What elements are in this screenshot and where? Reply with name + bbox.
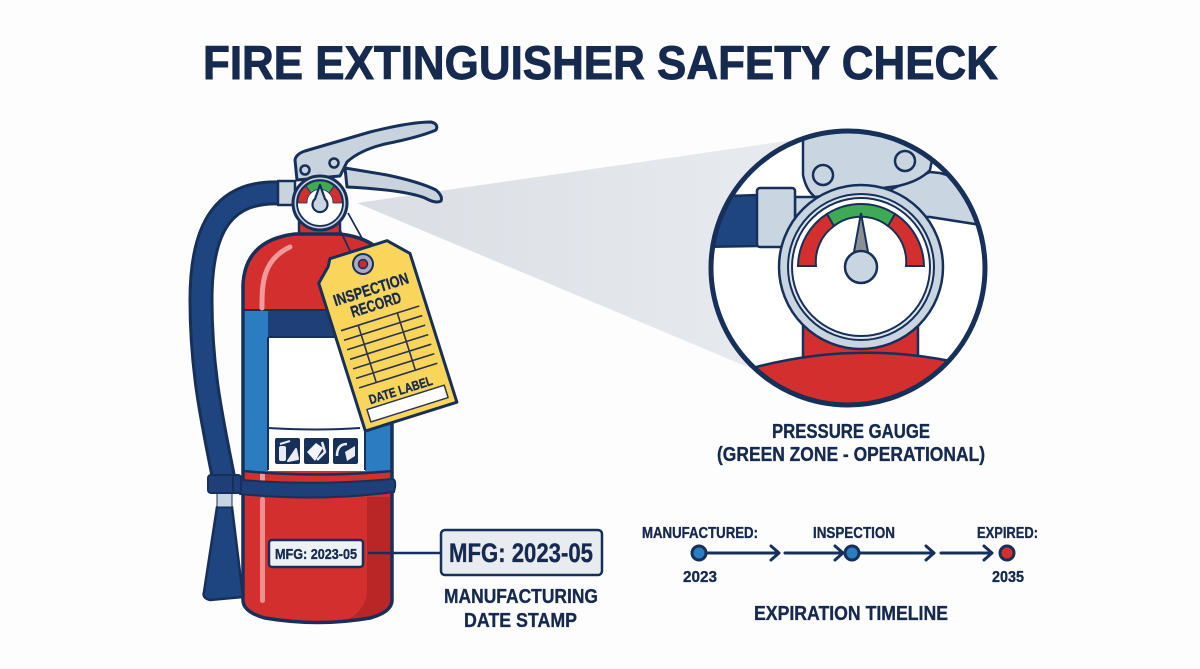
inset upper lever — [802, 134, 932, 197]
MFG label on cylinder — [269, 540, 363, 567]
hose collar — [278, 181, 295, 205]
inset lower lever — [889, 170, 976, 226]
manufacturing stamp callout — [441, 530, 602, 575]
fire extinguisher — [201, 122, 457, 622]
inspection tag: RECORD — [349, 290, 403, 321]
inset border — [711, 131, 985, 405]
date label text: DATE LABEL — [367, 373, 434, 407]
needle — [854, 213, 868, 252]
timeline labels: INSPECTION — [813, 525, 895, 542]
tag table — [341, 306, 437, 388]
timeline labels: 2035 — [992, 569, 1024, 586]
infographic canvas — [188, 46, 1037, 628]
inset collar — [757, 188, 815, 247]
manufacturing caption — [444, 586, 598, 632]
expiration timeline — [642, 525, 1038, 586]
gauge detail inset — [708, 128, 988, 408]
manufacturing stamp callout: MFG: 2023-05 — [449, 538, 593, 568]
needle hub — [845, 251, 877, 283]
large gauge — [779, 185, 943, 349]
red zone right — [888, 214, 924, 266]
cylinder body — [243, 234, 392, 622]
icon: hand on hose — [333, 438, 358, 464]
red zone left — [798, 214, 834, 266]
timeline arrows — [706, 546, 992, 560]
inset dome — [756, 352, 947, 402]
gauge caption: PRESSURE GAUGE — [772, 421, 930, 443]
upper lever — [295, 122, 437, 180]
tag string — [340, 213, 363, 257]
zoom cone from gauge to detail — [357, 139, 800, 368]
inspection tag — [313, 235, 457, 431]
manufacturing caption: DATE STAMP — [464, 610, 577, 632]
safety icons row — [275, 438, 358, 464]
timeline labels: MANUFACTURED: — [642, 525, 758, 542]
gauge caption: (GREEN ZONE - OPERATIONAL) — [717, 444, 985, 466]
small pressure gauge — [293, 176, 347, 230]
date label box — [367, 385, 448, 422]
inset hose — [715, 194, 758, 248]
timeline labels — [642, 525, 1038, 586]
icon: pin pull — [304, 438, 329, 464]
MFG label on cylinder: MFG: 2023-05 — [275, 546, 357, 563]
gauge caption — [717, 421, 985, 466]
neck — [299, 222, 340, 238]
lower lever — [345, 168, 441, 202]
title: FIRE EXTINGUISHER SAFETY CHECK — [203, 36, 998, 89]
timeline caption: EXPIRATION TIMELINE — [754, 603, 948, 625]
icon: extinguisher in hand — [275, 438, 300, 464]
inset pins — [813, 151, 915, 185]
green zone — [827, 204, 895, 226]
hose — [201, 193, 282, 600]
timeline labels: 2023 — [683, 569, 717, 586]
manufacturing caption: MANUFACTURING — [444, 586, 598, 608]
timeline labels: EXPIRED: — [977, 525, 1038, 542]
tag heading: INSPECTION — [332, 270, 411, 310]
inset neck — [802, 325, 920, 356]
retaining belt — [208, 475, 395, 498]
tag eyelet — [350, 251, 376, 277]
connector line — [368, 552, 440, 554]
timeline nodes — [692, 546, 1014, 560]
lever pins — [300, 158, 338, 174]
